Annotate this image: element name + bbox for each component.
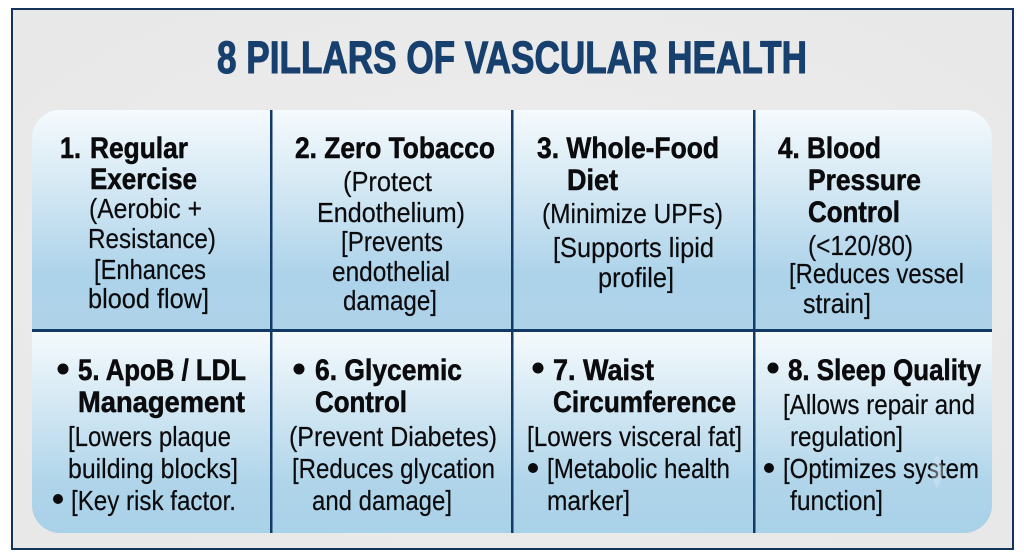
pillar 8: sleep quality [764,354,982,516]
title: 8 PILLARS OF VASCULAR HEALTH [217,32,807,83]
pillar 5: apob / ldl management [53,354,246,516]
pillar 4: blood pressure control: 4. Blood [778,132,881,165]
pillar 1: regular exercise: Regular [90,132,188,165]
pillar 7: waist circumference: 7. Waist [553,354,654,387]
pillar 1: regular exercise: Exercise [90,163,197,196]
pillar 6: glycemic control: and damage] [312,485,452,516]
pillar 2: zero tobacco: Endothelium) [317,197,465,228]
pillar 2: zero tobacco: damage] [343,285,437,316]
pillar 3: whole-food diet [537,132,723,293]
icon: sparkle [929,454,945,489]
pillar 5: apob / ldl management: 5. ApoB / LDL [78,354,246,387]
pillar 7: waist circumference: [Metabolic health [547,453,730,484]
pillar 6: glycemic control: (Prevent Diabetes) [289,421,497,452]
pillar 6: glycemic control: 6. Glycemic [315,354,462,387]
pillar 7: waist circumference: [Lowers visceral fat] [527,421,742,452]
pillar 4: blood pressure control [778,132,964,319]
pillar 5: apob / ldl management: Management [78,386,245,419]
pillar 8: sleep quality: [Optimizes system [783,453,979,484]
pillar 4: blood pressure control: strain] [803,288,871,319]
pillar 7: waist circumference: Circumference [553,386,736,419]
pillar 6: glycemic control [289,354,497,516]
pillar 2: zero tobacco: endothelial [332,256,450,287]
pillar 3: whole-food diet: [Supports lipid [553,232,714,263]
pillar 3: whole-food diet: (Minimize UPFs) [542,198,723,229]
pillar 8: sleep quality: function] [790,485,883,516]
pillar 7: waist circumference [527,354,742,516]
pillar 3: whole-food diet: profile] [598,262,674,293]
pillar 5: apob / ldl management: building blocks] [68,453,238,484]
pillar 7: waist circumference: marker] [547,485,630,516]
pillar 5: apob / ldl management: [Key risk factor. [71,485,236,516]
pillar 2: zero tobacco: (Protect [343,166,432,197]
pillar 4: blood pressure control: Control [808,196,900,229]
pillar 2: zero tobacco: [Prevents [341,226,443,257]
pillar 3: whole-food diet: 3. Whole-Food [537,132,719,165]
pillar 4: blood pressure control: [Reduces vessel [789,258,964,289]
pillar 8: sleep quality: 8. Sleep Quality [788,354,982,387]
pillar 2: zero tobacco [295,132,495,316]
pillar 1: regular exercise: (Aerobic + [89,193,202,224]
pillar 8: sleep quality: [Allows repair and [783,389,975,420]
pillar 8: sleep quality: regulation] [790,421,903,452]
pillar 4: blood pressure control: Pressure [808,164,921,197]
pillar 6: glycemic control: Control [315,386,407,419]
pillar 4: blood pressure control: (<120/80) [808,230,913,261]
pillar 1: regular exercise: 1. [60,132,81,165]
pillar 2: zero tobacco: 2. Zero Tobacco [295,132,495,165]
pillar 1: regular exercise: Resistance) [88,223,216,254]
pillar 1: regular exercise: blood flow] [88,283,209,314]
pillar 1: regular exercise: [Enhances [94,254,206,285]
pillar 5: apob / ldl management: [Lowers plaque [68,421,231,452]
pillar 3: whole-food diet: Diet [567,164,618,197]
panel: pillars grid [32,110,992,533]
pillar 1: regular exercise [60,132,216,314]
pillar 6: glycemic control: [Reduces glycation [292,453,495,484]
